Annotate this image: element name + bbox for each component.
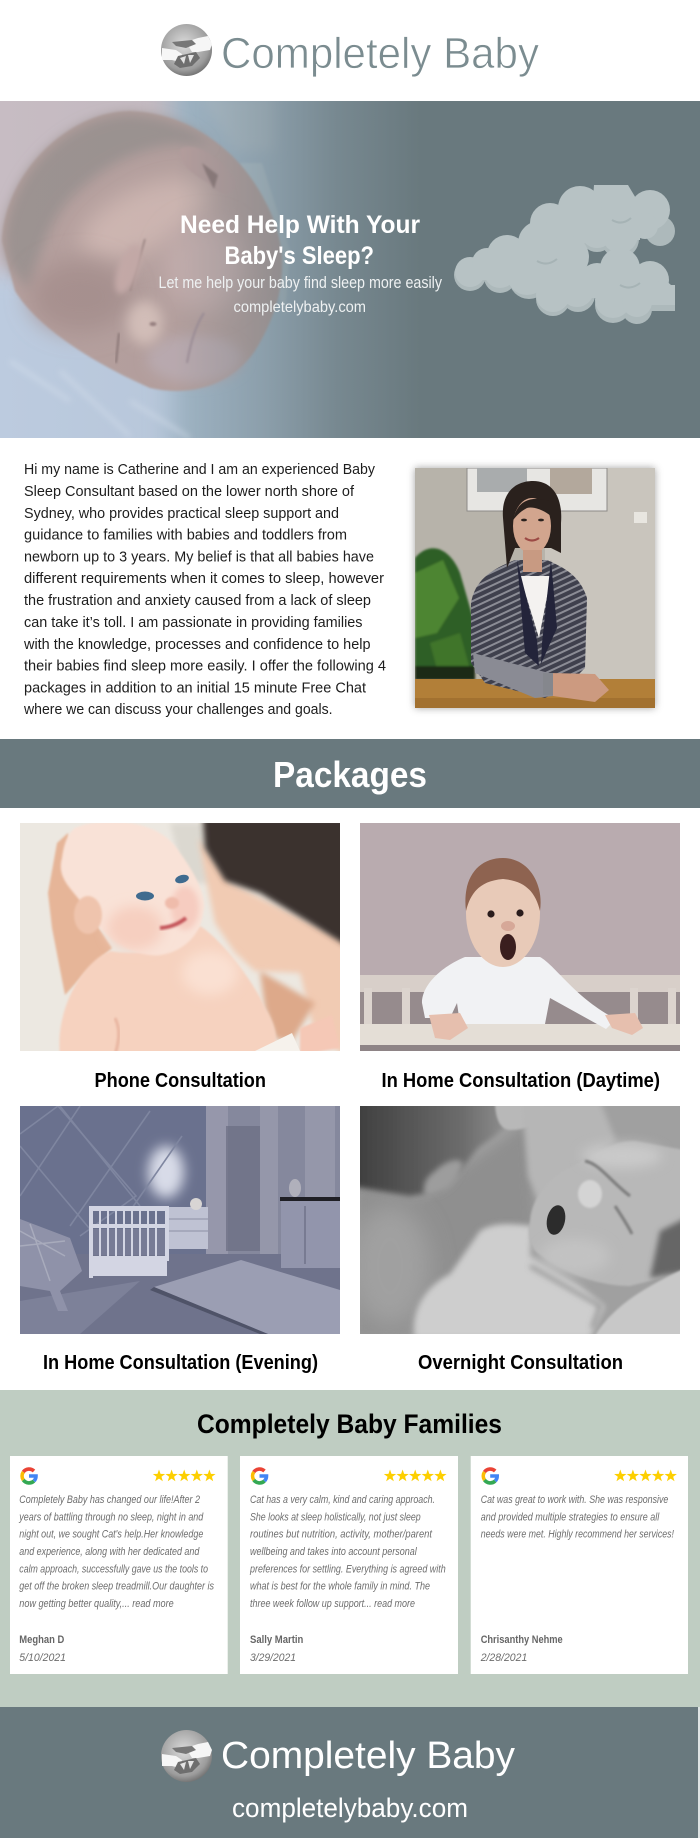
intro text: with the knowledge, processes and confidence to help <box>23 636 370 653</box>
review text <box>249 1494 446 1610</box>
rating: five stars <box>384 1470 447 1481</box>
intro text: different requirements when it comes to sleep, however <box>24 570 384 587</box>
header logo <box>161 24 539 78</box>
intro text <box>23 461 386 718</box>
hero website: completelybaby.com <box>234 299 366 316</box>
intro text: guidance to families with babies and toddlers from <box>24 526 347 544</box>
footer <box>0 1707 700 1838</box>
caption: Phone Consultation <box>94 1070 266 1092</box>
review text: years of battling through no sleep, night in and <box>18 1511 204 1523</box>
reviewer name: Meghan D <box>19 1634 65 1646</box>
packages heading: Packages <box>273 754 427 795</box>
logo wordmark: Completely Baby <box>221 29 539 78</box>
caption: In Home Consultation (Daytime) <box>382 1070 660 1092</box>
hero banner <box>0 61 700 481</box>
review text <box>481 1494 674 1541</box>
icon: Google G <box>22 1469 36 1483</box>
review text: Completely Baby has changed our life!After 2 <box>19 1494 200 1506</box>
intro text: can take it’s toll. I am passionate in providing families <box>24 614 362 631</box>
review text: Cat has a very calm, kind and caring approach. <box>250 1494 435 1506</box>
package card: in home daytime <box>360 823 680 1092</box>
photo: dim nursery <box>20 1106 340 1334</box>
hero subtitle: Let me help your baby find sleep more easily <box>158 274 443 292</box>
hero headline <box>180 211 420 270</box>
photo: black and white crying newborn <box>360 1106 680 1334</box>
review text: and experience, along with her dedicated and <box>19 1546 200 1558</box>
review text: calm approach, successfully gave us the tools to <box>19 1563 208 1575</box>
packages band <box>0 739 700 808</box>
reviewer name: Sally Martin <box>250 1634 303 1646</box>
review date: 5/10/2021 <box>19 1652 66 1664</box>
testimonials section <box>0 1390 700 1707</box>
review text: routines but nutrition, activity, mother/parent <box>250 1529 433 1541</box>
intro text: Sleep Consultant based on the lower north shore of <box>24 483 355 500</box>
testimonials heading: Completely Baby Families <box>197 1409 502 1439</box>
portrait photo: Catherine <box>415 468 655 708</box>
package card: overnight <box>350 1096 690 1374</box>
review date: 2/28/2021 <box>480 1652 527 1664</box>
reviewer name: Chrisanthy Nehme <box>481 1634 563 1646</box>
review card: Chrisanthy Nehme <box>471 1456 688 1674</box>
intro text: their babies find sleep more easily. I offer the following 4 <box>24 658 386 674</box>
rating: five stars <box>153 1470 216 1481</box>
review text: three week follow up support... read more <box>250 1598 415 1610</box>
icon: Google G <box>483 1469 497 1483</box>
review text <box>18 1494 214 1610</box>
review card: Meghan D <box>10 1456 228 1674</box>
hero headline: Baby's Sleep? <box>224 242 374 270</box>
review text: now getting better quality,... read more <box>19 1598 174 1610</box>
caption: In Home Consultation (Evening) <box>43 1352 318 1374</box>
review text: preferences for settling. Everything is agreed with <box>249 1563 446 1575</box>
icon: Google G <box>253 1469 267 1483</box>
package card: in home evening <box>20 1106 340 1374</box>
icon: logo hands emblem <box>161 24 212 76</box>
intro text: newborn up to 3 years. My belief is that all babies have <box>24 548 374 566</box>
review text: get off the broken sleep treadmill.Our daughter is <box>19 1581 214 1593</box>
package card: phone consultation <box>20 818 350 1092</box>
intro text: where we can discuss your challenges and goals. <box>23 701 333 718</box>
photo: yawning baby in crib <box>360 823 680 1051</box>
intro text: Hi my name is Catherine and I am an experienced Baby <box>24 461 375 478</box>
footer wordmark: Completely Baby <box>221 1735 515 1777</box>
hero photo: sleeping baby <box>0 101 700 438</box>
review text: and provided multiple strategies to ensure all <box>481 1511 660 1523</box>
review text: what is best for the whole family in mind. The <box>250 1581 430 1593</box>
review date: 3/29/2021 <box>250 1652 296 1664</box>
review text: She looks at sleep holistically, not just sleep <box>250 1511 421 1523</box>
review text: night out, we sought Cat's help.Her knowledge <box>19 1529 203 1541</box>
review card: Sally Martin <box>240 1456 458 1674</box>
icon: logo hands emblem <box>161 1730 212 1782</box>
intro text: Sydney, who provides practical sleep support and <box>24 505 339 522</box>
review text: wellbeing and takes into account personal <box>250 1546 417 1558</box>
hero headline: Need Help With Your <box>180 211 420 239</box>
intro text: packages in addition to an initial 15 minute Free Chat <box>24 680 367 696</box>
icon: clouds <box>454 185 675 324</box>
caption: Overnight Consultation <box>418 1352 623 1374</box>
intro text: the frustration and anxiety caused from a lack of sleep <box>24 592 371 609</box>
photo: baby and mother <box>20 823 340 1051</box>
rating: five stars <box>614 1470 677 1481</box>
footer website: completelybaby.com <box>232 1793 468 1823</box>
